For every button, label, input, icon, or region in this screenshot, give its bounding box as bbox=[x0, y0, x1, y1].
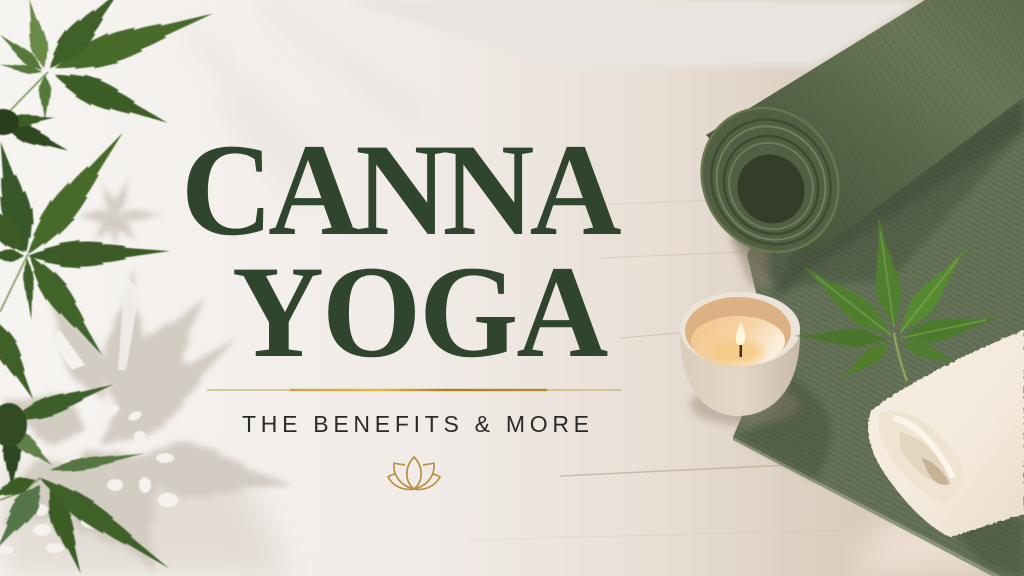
roll ribs bbox=[706, 0, 1024, 250]
cup bbox=[680, 292, 800, 416]
dappled light spots bbox=[0, 275, 178, 554]
wax bbox=[691, 316, 785, 366]
mat front edge bbox=[733, 437, 1000, 576]
roll end bbox=[675, 82, 865, 278]
cup inner bbox=[685, 297, 791, 365]
window shadow streaks bbox=[190, 0, 420, 190]
floor shadow beside roll bbox=[730, 235, 770, 290]
mat shadows bbox=[735, 100, 1024, 576]
sunlight beam on floor bbox=[850, 510, 1000, 576]
back wall bbox=[340, 0, 925, 66]
cup rim bbox=[680, 292, 800, 366]
rolled towel bbox=[868, 330, 1024, 537]
plank seams bbox=[470, 197, 840, 540]
yoga mat bbox=[733, 85, 1024, 576]
cannabis plant left bbox=[0, 0, 218, 576]
candle bbox=[680, 292, 800, 425]
floor shading at lower left bbox=[0, 470, 290, 576]
leaf cluster lower bbox=[0, 375, 145, 490]
towel body bbox=[868, 330, 1024, 537]
gold divider bbox=[207, 389, 621, 391]
icon: lotus bbox=[388, 457, 440, 489]
flame glow bbox=[712, 340, 764, 364]
wick bbox=[740, 345, 742, 357]
subtitle: THE BENEFITS & MORE bbox=[242, 411, 589, 437]
rolled yoga mat bbox=[675, 0, 1024, 290]
flame bbox=[736, 322, 745, 346]
leaf shadows on floor bbox=[0, 175, 298, 576]
cannabis leaf on mat bbox=[794, 214, 1004, 386]
stems bbox=[0, 72, 48, 500]
title bbox=[181, 117, 621, 386]
cast shadow bbox=[730, 90, 1024, 290]
leaf cluster bottom bbox=[0, 468, 176, 576]
leaf stem bbox=[894, 333, 907, 381]
title line 1: CANNA bbox=[181, 117, 621, 264]
leaf cluster top bbox=[0, 0, 218, 136]
spiral layers bbox=[675, 82, 865, 278]
roll body bbox=[706, 0, 1024, 250]
towel spiral bbox=[878, 411, 963, 503]
candle shadow bbox=[690, 385, 800, 425]
leaf cluster second bbox=[0, 109, 72, 159]
roll hollow bbox=[724, 142, 818, 236]
lower leaflet bbox=[0, 312, 44, 405]
mat body bbox=[733, 85, 1024, 576]
title line 2: YOGA bbox=[232, 239, 608, 386]
main leaf bbox=[0, 123, 170, 363]
